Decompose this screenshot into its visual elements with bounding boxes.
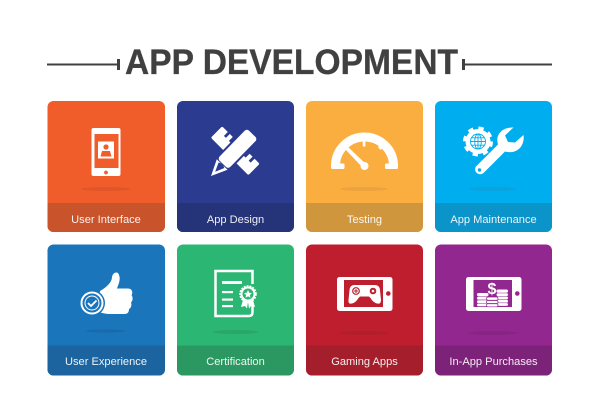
- label: App Design: [207, 214, 264, 226]
- label: Certification: [206, 356, 265, 368]
- label: App Maintenance: [450, 214, 537, 226]
- coin stacks: [477, 290, 508, 307]
- icon: certificate with seal: [216, 271, 256, 316]
- panel: Certification: [177, 244, 294, 376]
- label: In-App Purchases: [449, 356, 538, 368]
- icon: ruler and pencil: [204, 126, 260, 183]
- title: APP DEVELOPMENT: [125, 43, 458, 82]
- dollar sign: $: [488, 281, 497, 298]
- panel: In-App Purchases: [435, 244, 552, 376]
- title: [47, 43, 552, 82]
- icon: phone with game controller: [337, 277, 392, 311]
- label: Testing: [347, 214, 382, 226]
- panel: Testing: [306, 101, 423, 232]
- panel: User Interface: [48, 101, 165, 232]
- icon: speedometer gauge: [331, 137, 398, 170]
- panel: App Maintenance: [435, 101, 552, 232]
- icon: thumbs up with check badge: [79, 273, 133, 316]
- icon: gear with globe and wrench: [465, 127, 524, 174]
- label: Gaming Apps: [331, 356, 398, 368]
- panel: App Design: [177, 101, 294, 232]
- label: User Experience: [65, 356, 147, 368]
- icon: smartphone with user profile: [92, 128, 120, 176]
- panel: User Experience: [48, 244, 165, 376]
- label: User Interface: [71, 214, 141, 226]
- panel: Gaming Apps: [306, 244, 423, 376]
